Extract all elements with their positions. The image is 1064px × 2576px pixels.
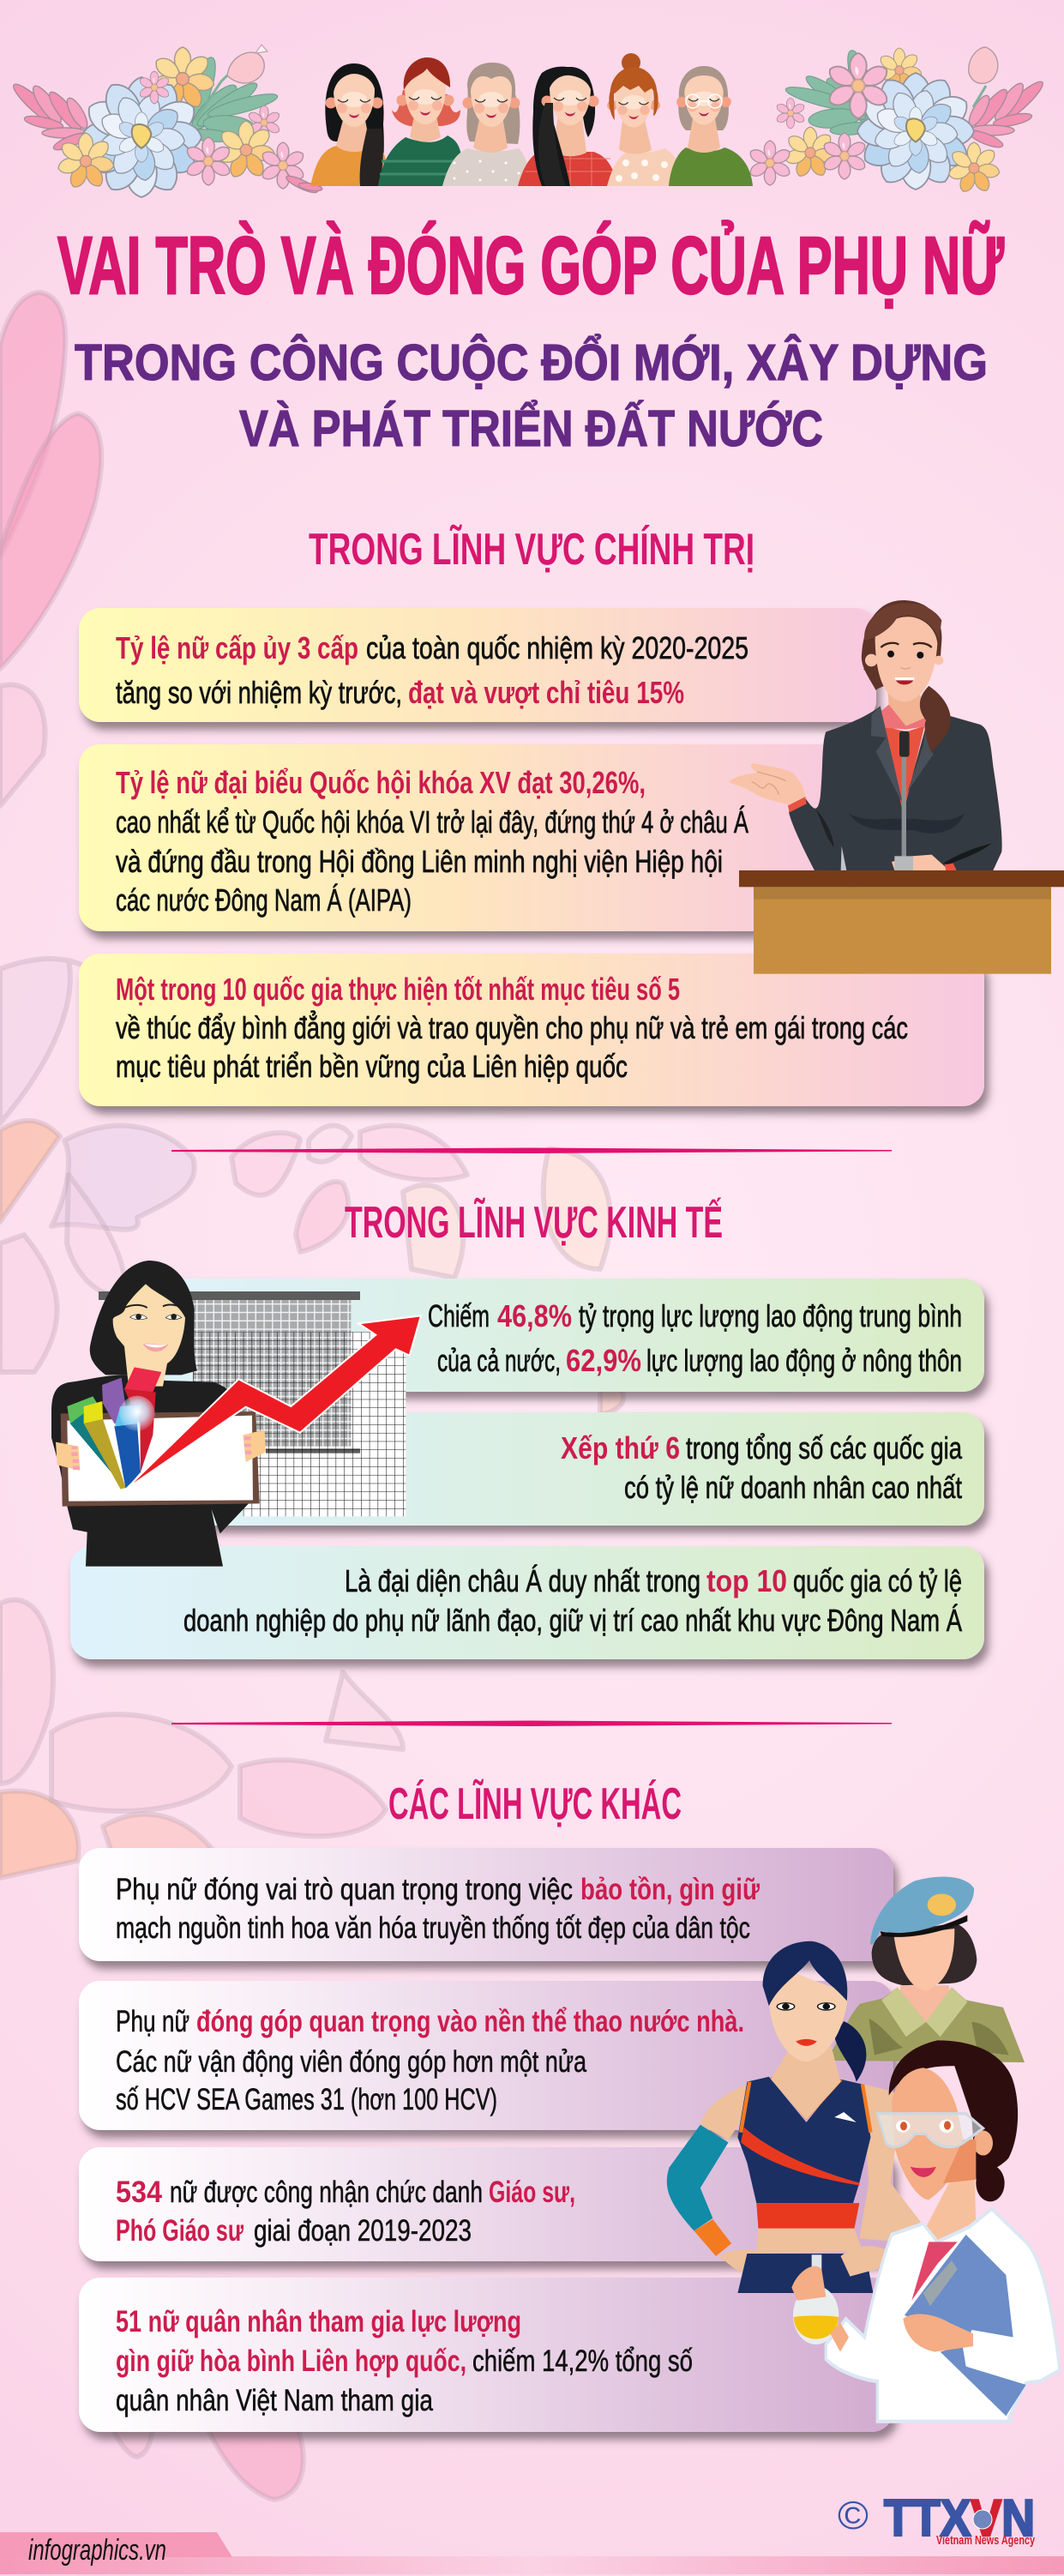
website label: infographics.vn — [28, 2534, 166, 2567]
text card other 1: bảo tồn, gìn giữ — [580, 1873, 760, 1906]
text card politics 2: và đứng đầu trong Hội đồng Liên minh nghị viện Hiệp hội — [116, 844, 723, 879]
text card economy 3: top 10 — [706, 1563, 787, 1598]
background watercolor flowers — [0, 292, 623, 2500]
text card economy 1 — [428, 1298, 962, 1378]
woman 4 — [518, 67, 617, 186]
heading: other fields: CÁC LĨNH VỰC KHÁC — [388, 1779, 682, 1829]
icon: rose bud right — [969, 47, 998, 107]
text card politics 3: mục tiêu phát triển bền vững của Liên hiệp quốc — [116, 1049, 628, 1084]
text card other 4: chiếm 14,2% tổng số — [472, 2344, 693, 2378]
lectern — [739, 870, 1064, 974]
divider 2 — [171, 1720, 892, 1726]
card economy 3 — [70, 1546, 984, 1659]
text card economy 2: có tỷ lệ nữ doanh nhân cao nhất — [624, 1470, 962, 1505]
card politics 1 — [79, 608, 876, 722]
text card politics 2 — [116, 765, 748, 918]
text card other 3: nữ được công nhận chức danh — [170, 2176, 483, 2209]
card other 2 — [79, 1981, 893, 2130]
illustration: woman at lectern — [729, 600, 1064, 974]
card politics 3 — [79, 954, 984, 1106]
text card politics 1: đạt và vượt chỉ tiêu 15% — [408, 675, 684, 710]
text card politics 1: của toàn quốc nhiệm kỳ 2020-2025 — [366, 630, 748, 665]
header flower bouquet right — [748, 47, 1047, 194]
text card other 2: Các nữ vận động viên đóng góp hơn một nửa — [116, 2045, 586, 2079]
illustration: athlete — [667, 1941, 922, 2293]
heading: politics: TRONG LĨNH VỰC CHÍNH TRỊ — [309, 524, 754, 575]
six women portraits — [310, 53, 753, 186]
panel: politics cards — [79, 608, 984, 1106]
card other 1 — [79, 1848, 893, 1961]
text card economy 1: Chiếm — [428, 1298, 490, 1333]
header flower bouquet left — [9, 45, 322, 197]
woman 6 — [669, 66, 753, 186]
text card other 2: số HCV SEA Games 31 (hơn 100 HCV) — [116, 2083, 497, 2116]
text card other 4: 51 nữ quân nhân tham gia lực lượng — [116, 2305, 521, 2338]
card economy 2 — [154, 1412, 984, 1526]
text card other 3: Phó Giáo sư — [116, 2214, 243, 2248]
text card economy 1: của cả nước, — [437, 1343, 561, 1378]
text card politics 1: Tỷ lệ nữ cấp ủy 3 cấp — [116, 630, 358, 665]
text card other 1: Phụ nữ đóng vai trò quan trọng trong việc — [116, 1873, 573, 1906]
text card politics 3 — [116, 972, 908, 1084]
footer tab — [0, 2532, 232, 2557]
3D bars — [67, 1367, 161, 1490]
footer band — [0, 2556, 1064, 2574]
text card economy 3: quốc gia có tỷ lệ — [793, 1563, 962, 1598]
hands — [56, 1429, 266, 1471]
text card politics 2: các nước Đông Nam Á (AIPA) — [116, 882, 412, 918]
text card other 2 — [116, 2005, 744, 2116]
text card other 3: 534 — [116, 2176, 162, 2209]
card economy 1 — [129, 1279, 984, 1392]
woman 5 — [607, 53, 684, 186]
red rising arrow — [126, 1315, 421, 1490]
panel: other cards — [79, 1848, 893, 2432]
text card other 2: Phụ nữ — [116, 2005, 189, 2038]
woman 3 — [442, 63, 532, 186]
card politics 2 — [79, 744, 851, 931]
text card politics 3: Một trong 10 quốc gia thực hiện tốt nhất mục tiêu số 5 — [116, 972, 680, 1007]
woman 1 — [310, 63, 388, 186]
text card other 3 — [116, 2176, 575, 2248]
TTXVN logo: TTXVN — [884, 2489, 1035, 2547]
text card economy 3 — [183, 1563, 962, 1638]
illustration: soldier — [826, 1877, 1025, 2062]
text card politics 1: tăng so với nhiệm kỳ trước, — [116, 675, 402, 710]
text card economy 1: 46,8% — [497, 1298, 572, 1333]
clipboard — [61, 1411, 260, 1507]
text card other 3: giai đoạn 2019-2023 — [254, 2214, 472, 2248]
text card economy 2 — [561, 1430, 963, 1505]
text card other 2: đóng góp quan trọng vào nền thể thao nước nhà. — [196, 2005, 744, 2038]
text card other 1: mạch nguồn tinh hoa văn hóa truyền thống tốt đẹp của dân tộc — [116, 1911, 750, 1945]
subtitle line 2: VÀ PHÁT TRIỂN ĐẤT NƯỚC — [239, 400, 823, 457]
icon: rose bud — [195, 45, 268, 120]
text card economy 3: Là đại diện châu Á duy nhất trong — [345, 1563, 700, 1598]
text card other 4 — [116, 2305, 693, 2417]
card other 3 — [79, 2147, 893, 2261]
text card other 3: Giáo sư, — [489, 2176, 575, 2209]
copyright symbol: © — [838, 2493, 869, 2537]
woman 2 — [378, 57, 464, 186]
icon: globe — [973, 2510, 992, 2529]
card other 4 — [79, 2278, 893, 2432]
text card economy 2: Xếp thứ 6 — [561, 1430, 680, 1466]
panel: economy cards — [70, 1279, 984, 1659]
heading: economy: TRONG LĨNH VỰC KINH TẾ — [345, 1197, 723, 1248]
grid chart — [99, 1291, 406, 1516]
subtitle — [75, 334, 988, 457]
divider 1 — [171, 1147, 892, 1153]
text card other 1 — [116, 1873, 760, 1945]
text card economy 2: trong tổng số các quốc gia — [686, 1430, 963, 1466]
text card politics 1 — [116, 630, 748, 710]
text card politics 2: Tỷ lệ nữ đại biểu Quốc hội khóa XV đạt 30,26%, — [116, 765, 646, 800]
text card other 4: gìn giữ hòa bình Liên hợp quốc, — [116, 2344, 466, 2378]
text card politics 2: cao nhất kể từ Quốc hội khóa VI trở lại đây, đứng thứ 4 ở châu Á — [116, 804, 748, 840]
text card other 4: quân nhân Việt Nam tham gia — [116, 2384, 433, 2417]
text card economy 1: 62,9% — [566, 1343, 641, 1378]
illustration: scientist — [791, 2040, 1060, 2422]
illustration: businesswoman with rising chart — [51, 1261, 421, 1567]
